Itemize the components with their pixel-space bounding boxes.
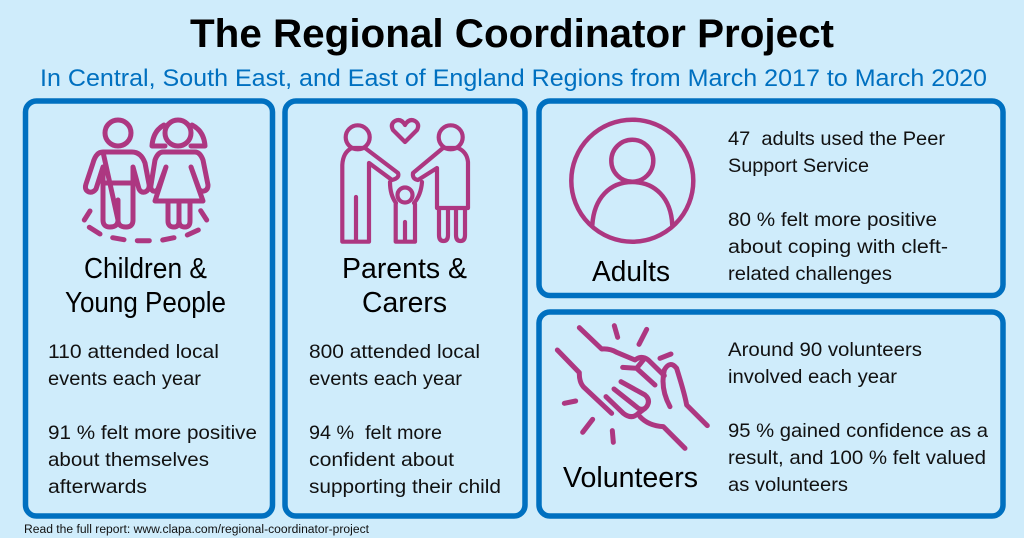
- footer: report link: Read the full report: www.clapa.com/regional-coordinator-project: [24, 524, 370, 536]
- text: volunteers statistics: Around 90 volunteers: [728, 339, 922, 361]
- subtitle: In Central, South East, and East of England Regions from March 2017 to March 2020: [40, 65, 987, 92]
- text: volunteers statistics: [728, 339, 988, 496]
- heading: parents and carers: [342, 253, 467, 319]
- heading: children and young people: Young People: [65, 287, 226, 319]
- icon: person in circle: [571, 120, 693, 242]
- text: adults statistics: Support Service: [728, 155, 869, 177]
- text: parents statistics: 94 % felt more: [309, 422, 442, 444]
- heading: volunteers: Volunteers: [563, 462, 698, 494]
- text: adults statistics: about coping with cleft-: [728, 236, 948, 258]
- text: adults statistics: 47 adults used the Peer: [728, 128, 946, 150]
- heading: parents and carers: Parents &: [342, 253, 467, 285]
- text: volunteers statistics: involved each year: [728, 366, 898, 388]
- text: children statistics: [48, 341, 257, 498]
- panel: adults: [539, 101, 1003, 296]
- heading: children and young people: [65, 253, 226, 319]
- panel: volunteers: [539, 312, 1003, 516]
- text: volunteers statistics: as volunteers: [728, 474, 848, 496]
- icon: parents holding child's hands with heart: [342, 120, 468, 242]
- panel: children and young people: [26, 101, 272, 516]
- text: parents statistics: [309, 341, 501, 498]
- text: children statistics: about themselves: [48, 449, 209, 471]
- heading: children and young people: Children &: [84, 253, 207, 285]
- text: adults statistics: 80 % felt more positive: [728, 209, 937, 231]
- text: parents statistics: confident about: [309, 449, 455, 471]
- text: parents statistics: 800 attended local: [309, 341, 480, 363]
- text: parents statistics: events each year: [309, 368, 463, 390]
- icon: boy and girl holding hands: [84, 120, 208, 241]
- heading: adults: Adults: [592, 256, 670, 288]
- text: volunteers statistics: result, and 100 % felt valued: [728, 447, 986, 469]
- text: children statistics: events each year: [48, 368, 202, 390]
- title: The Regional Coordinator Project: [190, 12, 834, 56]
- text: parents statistics: supporting their child: [309, 476, 501, 498]
- panel: parents and carers: [285, 101, 525, 516]
- heading: parents and carers: Carers: [362, 287, 447, 319]
- text: children statistics: 110 attended local: [48, 341, 219, 363]
- text: adults statistics: related challenges: [728, 263, 892, 285]
- text: children statistics: afterwards: [48, 476, 147, 498]
- text: adults statistics: [728, 128, 948, 285]
- text: volunteers statistics: 95 % gained confidence as a: [728, 420, 988, 442]
- text: children statistics: 91 % felt more positive: [48, 422, 257, 444]
- icon: clasped hands: [557, 326, 707, 448]
